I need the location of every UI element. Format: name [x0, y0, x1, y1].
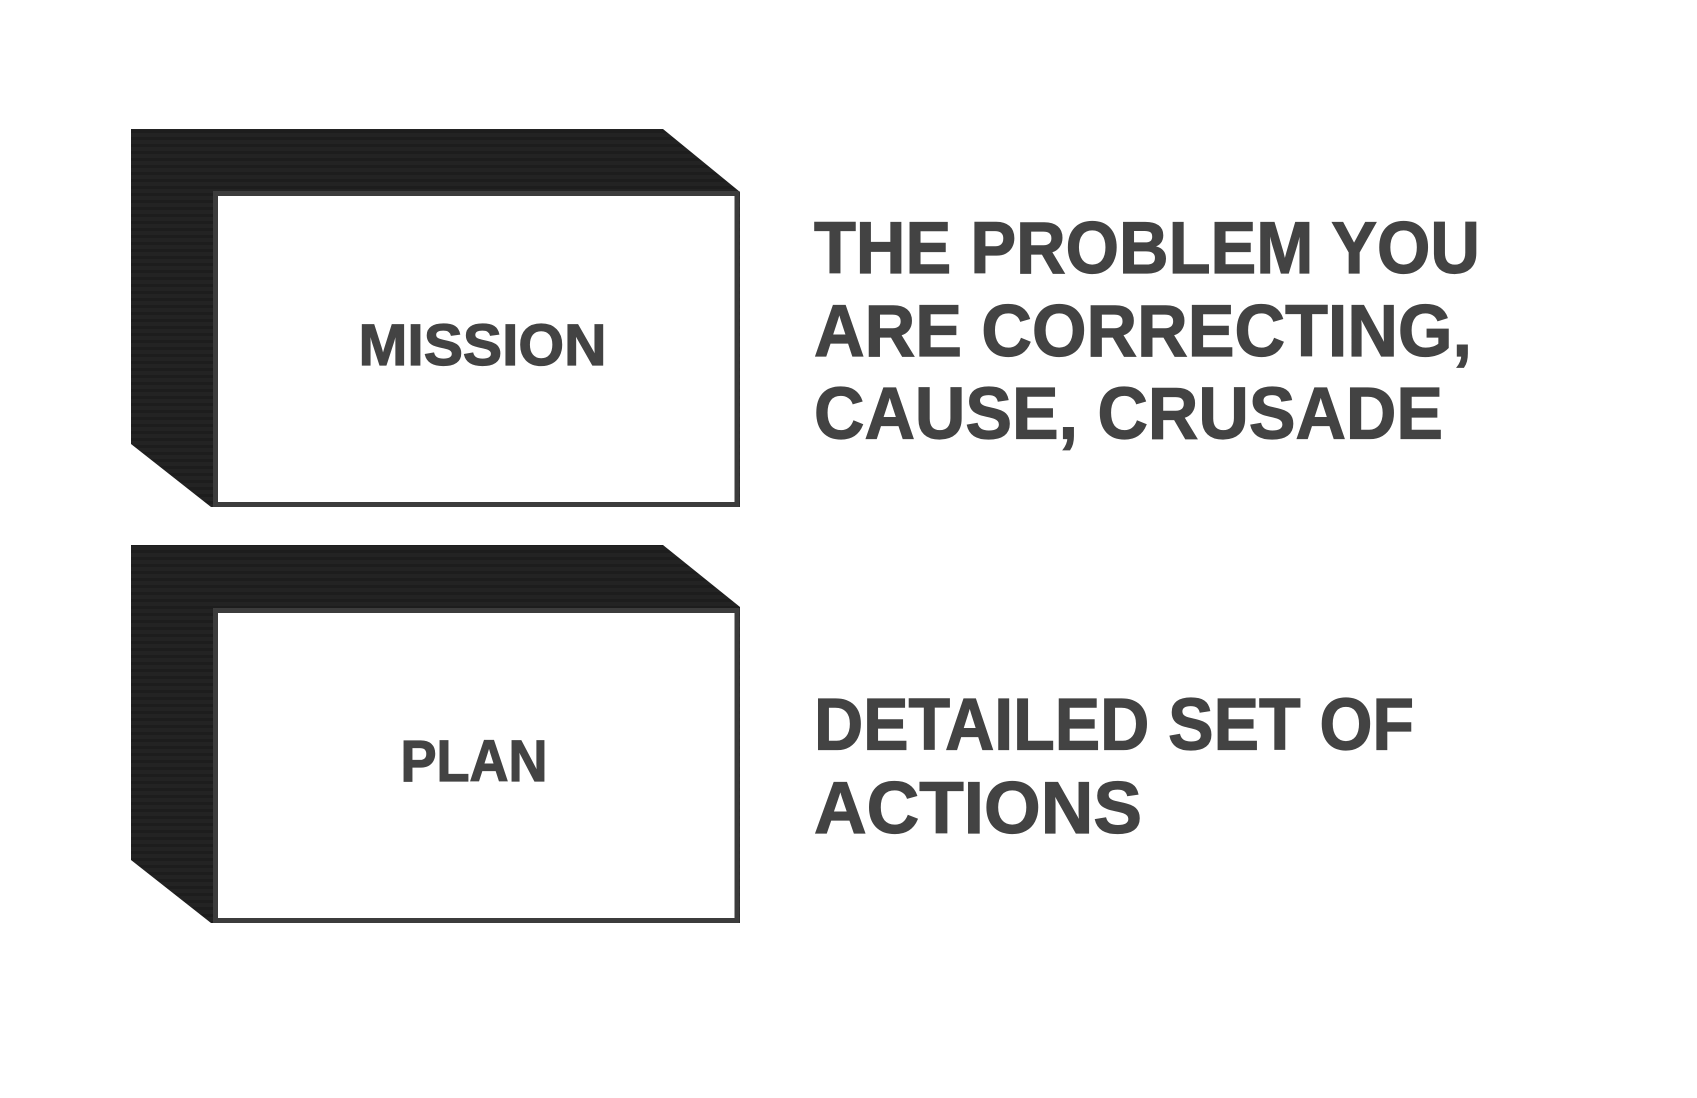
box front: mission	[216, 194, 737, 504]
box depth: mission	[131, 129, 740, 507]
text block: plan description	[814, 684, 1414, 849]
panel: mission box	[131, 129, 740, 507]
text block: plan description: ACTIONS	[814, 768, 1142, 849]
text block: mission description: THE PROBLEM YOU	[814, 208, 1480, 289]
text block: mission description	[814, 208, 1480, 454]
box depth: plan	[131, 545, 740, 923]
label: mission: MISSION	[358, 313, 606, 378]
text block: plan description: DETAILED SET OF	[814, 684, 1414, 766]
text block: mission description: CAUSE, CRUSADE	[814, 374, 1443, 454]
panel: plan box	[131, 545, 740, 923]
box front: plan	[216, 610, 737, 920]
label: plan: PLAN	[400, 729, 548, 794]
text block: mission description: ARE CORRECTING,	[814, 291, 1472, 372]
